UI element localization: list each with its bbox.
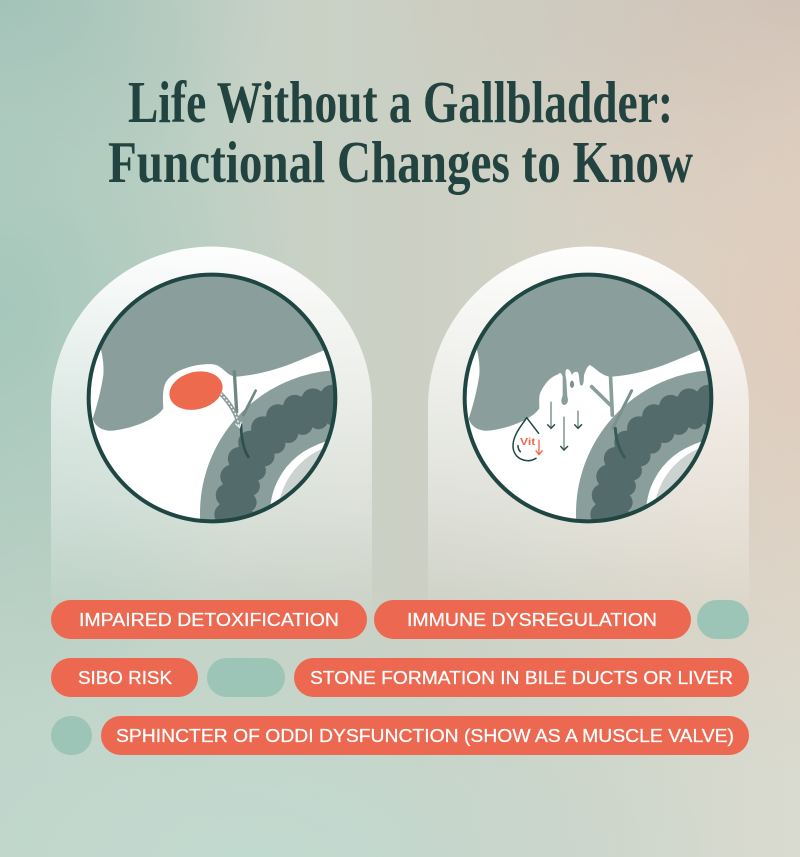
illustration: bile duct stone xyxy=(86,272,338,524)
pill: impaired detoxification xyxy=(51,600,367,639)
pill: sphincter of oddi dysfunction: SPHINCTER OF ODDI DYSFUNCTION (SHOW AS A MUSCLE VALVE) xyxy=(116,726,734,746)
panel: left arch xyxy=(51,247,372,620)
pill: impaired detoxification: IMPAIRED DETOXIFICATION xyxy=(79,610,339,630)
bile drop xyxy=(570,381,574,388)
ducts xyxy=(592,372,632,457)
title xyxy=(108,69,693,195)
pill: sphincter of oddi dysfunction xyxy=(101,716,749,755)
vitamin droplet xyxy=(513,418,543,461)
circle outline xyxy=(89,275,335,521)
stone xyxy=(165,366,227,415)
illustration: bile leakage and vitamin loss xyxy=(462,272,714,524)
pill: sibo risk: SIBO RISK xyxy=(78,668,172,688)
panel: right arch xyxy=(428,246,749,620)
teal pill row 2 xyxy=(207,658,285,697)
pill: immune dysregulation: IMMUNE DYSREGULATION xyxy=(407,610,657,630)
teal pill row 1 xyxy=(697,600,749,639)
pill: stone formation: STONE FORMATION IN BILE DUCTS OR LIVER xyxy=(310,668,733,688)
bile arrows xyxy=(547,402,582,450)
dotted arrow xyxy=(221,394,241,428)
vitamin droplet: Vit xyxy=(520,437,536,448)
circle outline xyxy=(465,275,711,521)
bile ducts xyxy=(234,372,256,457)
pill: stone formation xyxy=(294,658,749,697)
pill: immune dysregulation xyxy=(374,600,691,639)
teal pill row 3 xyxy=(51,716,92,755)
pill: sibo risk xyxy=(51,658,198,697)
